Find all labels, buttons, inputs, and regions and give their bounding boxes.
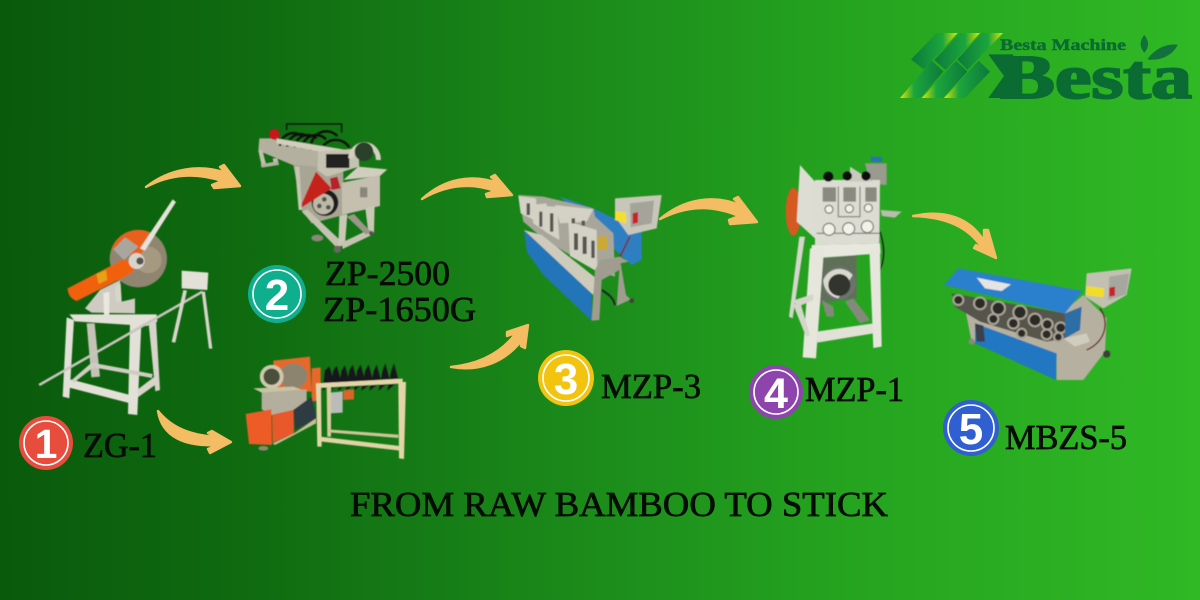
badge 1: 1 [35,421,57,467]
label ZG-1: ZG-1 [83,426,157,465]
machine 3: MZP-3 [518,195,662,321]
label ZP-2500: ZP-2500 [325,254,450,293]
logo tagline: Besta Machine [1000,37,1126,54]
machine 2b: orange splitter with rack [246,357,406,459]
logo wordmark: Besta [1000,44,1192,112]
machine 4: MZP-1 [786,157,902,358]
title: FROM RAW BAMBOO TO STICK [350,485,888,524]
badge 5 [943,400,999,456]
label MZP-3: MZP-3 [601,367,701,406]
machine 2: ZP-2500 splitter [258,124,387,253]
step 1 badge and label [19,416,157,470]
badge 4 [749,365,803,419]
label MZP-1: MZP-1 [805,370,904,409]
arrow: orange splitter to MZP-3 [451,325,528,368]
arrow: ZG-1 to ZP-2500 [146,165,240,188]
step 5 badge and label [943,400,1127,457]
arrow: MZP-1 to MBZS-5 [913,214,996,258]
step 2 badge and labels [248,254,476,329]
step 3 badge and label [538,350,701,406]
logo: Besta Machine [900,33,1192,112]
machine 5: MBZS-5 [944,268,1132,380]
badge 2 [248,265,306,323]
logo mark: woven bamboo [900,33,1178,98]
arrow: ZG-1 to orange splitter [158,411,231,453]
badge 2: 2 [265,271,289,320]
label MBZS-5: MBZS-5 [1005,418,1127,457]
machine 1: ZG-1 saw [38,199,212,415]
arrow: ZP-2500 to MZP-3 [422,175,512,199]
badge 4: 4 [764,370,788,418]
badge 3 [538,350,594,406]
badge 3: 3 [554,355,578,404]
label ZP-1650G: ZP-1650G [323,290,476,329]
step 4 badge and label [749,365,904,419]
badge 5: 5 [959,405,983,454]
arrow: MZP-3 to MZP-1 [660,197,757,224]
